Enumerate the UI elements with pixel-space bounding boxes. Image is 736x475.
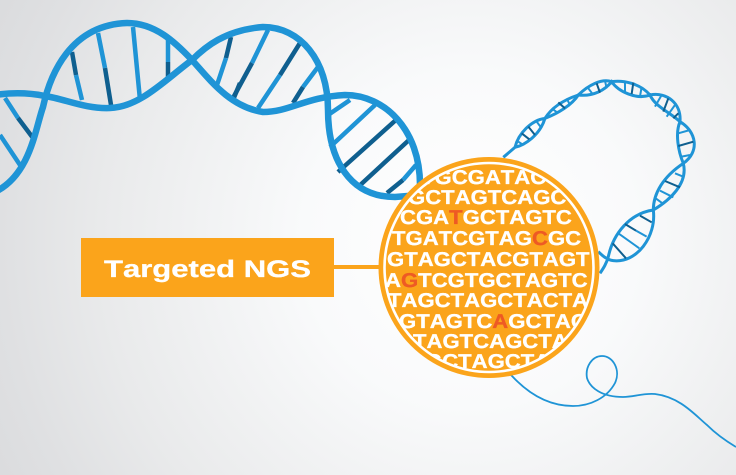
label box: Targeted NGS [81,238,334,297]
label text: Targeted NGS [104,256,311,283]
strand two [0,23,420,197]
connector line [332,265,382,269]
small DNA helix [503,81,694,273]
sequence letters: AGTCGTGCTAGTC [385,270,588,292]
thin single strand tail [505,356,736,447]
sequence letters: TGATCGTAGCGC [392,228,581,250]
large DNA helix [0,23,420,197]
dark rungs of large helix [18,37,409,193]
sequence letters: TAGCTAGCTACTA [388,290,588,312]
small helix strands [503,81,694,273]
sequence letters: GCTAGCTAG [425,351,567,373]
sequence letters: GTAGCTACGTAGT [387,249,590,271]
sequence letters [385,167,590,373]
small helix dark rungs [522,83,693,258]
sequence letters: TAGTCAGCTA [413,331,568,353]
strand one [0,60,420,185]
sequence letters: TGCGATACG [421,167,563,189]
white inner ring [384,163,594,372]
sequence letters: CGATGCTAGTC [400,207,572,229]
sequence letters: GTAGTCAGCTAC [399,311,587,333]
light rungs of large helix [0,27,416,180]
sequence letters: GCTAGTCAGCT [408,187,580,209]
small helix light rungs [518,81,690,248]
outer orange ring [378,157,600,378]
magnifier circle with sequence [378,157,600,378]
